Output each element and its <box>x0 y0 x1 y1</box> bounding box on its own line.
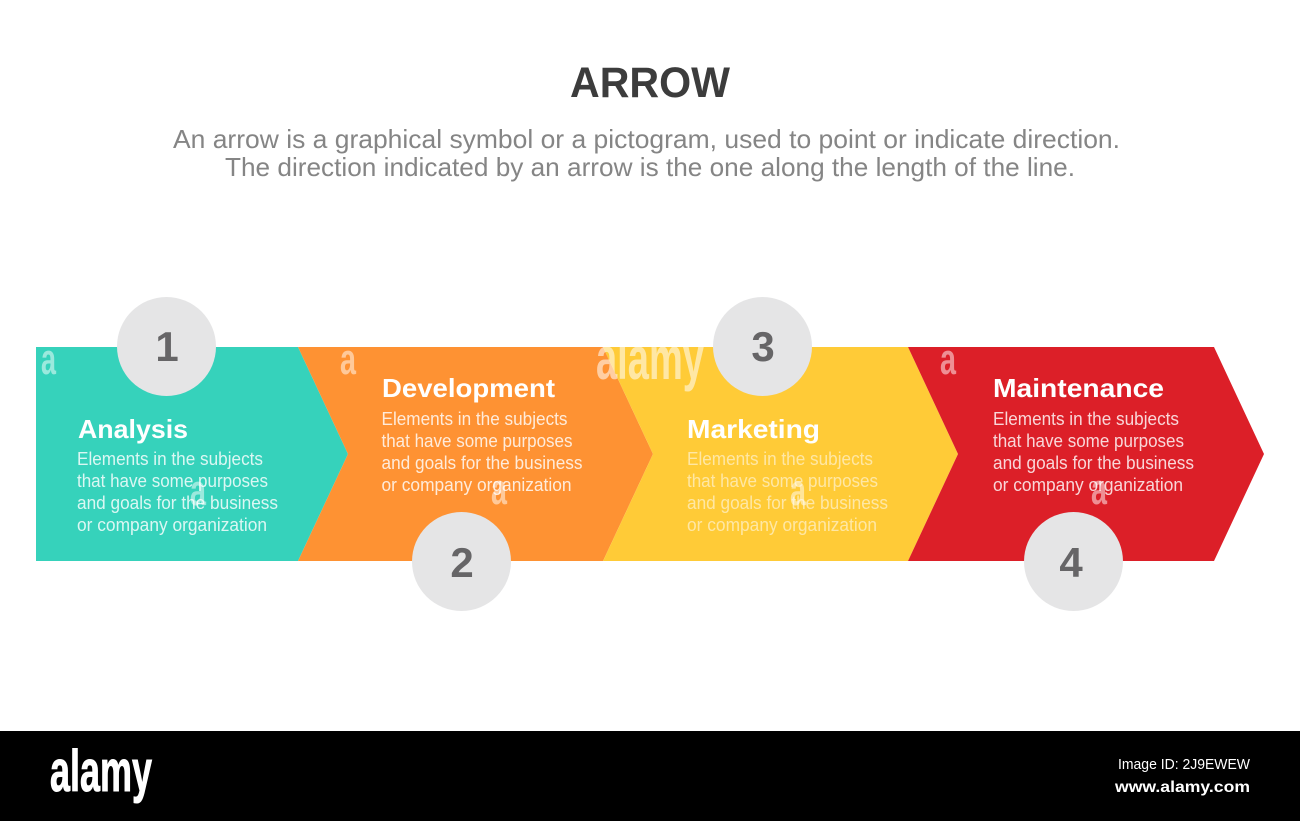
footer bar <box>0 731 1300 821</box>
heading: marketing: Marketing <box>687 414 820 444</box>
watermark marks: alamy <box>596 325 704 392</box>
subtitle text <box>173 124 1120 182</box>
text block: analysis: that have some purposes <box>77 471 268 491</box>
watermark marks: a <box>41 335 56 384</box>
heading: maintenance: Maintenance <box>993 373 1164 403</box>
number badge 1 <box>117 297 216 396</box>
text block: maintenance <box>993 409 1194 495</box>
panel: development arrow segment <box>298 347 653 561</box>
website: www.alamy.com <box>1114 779 1250 796</box>
text block: marketing: and goals for the business <box>687 493 888 513</box>
text block: marketing: or company organization <box>687 515 877 535</box>
title: ARROW <box>570 59 730 107</box>
number badge 4: 4 <box>1059 539 1083 586</box>
text block: maintenance: and goals for the business <box>993 453 1194 473</box>
panel: marketing arrow segment <box>603 347 958 561</box>
text block: development: that have some purposes <box>382 431 572 451</box>
number badge 3 <box>713 297 812 396</box>
watermark marks: a <box>190 466 206 515</box>
watermark marks <box>41 325 1107 515</box>
panel: maintenance arrow segment <box>908 347 1264 561</box>
text block: maintenance: Elements in the subjects <box>993 409 1179 429</box>
panel: analysis arrow segment <box>36 347 348 561</box>
subtitle text: The direction indicated by an arrow is the one along the length of the line. <box>225 152 1075 182</box>
text block: analysis: Elements in the subjects <box>77 449 263 469</box>
text block: analysis: or company organization <box>77 515 267 535</box>
watermark marks: a <box>1091 465 1107 514</box>
number badge 1: 1 <box>155 323 179 370</box>
watermark marks: a <box>491 465 507 514</box>
footer logo: alamy <box>50 739 152 804</box>
text block: development: Elements in the subjects <box>382 409 568 429</box>
number badge 4 <box>1024 512 1123 611</box>
number badge 2 <box>412 512 511 611</box>
heading: analysis: Analysis <box>78 414 188 444</box>
text block: development: and goals for the business <box>382 453 582 473</box>
text block: maintenance: or company organization <box>993 475 1183 495</box>
image id: Image ID: 2J9EWEW <box>1118 756 1251 773</box>
text block: development: or company organization <box>382 475 572 495</box>
number badge 2: 2 <box>450 539 474 586</box>
text block: analysis <box>77 449 278 535</box>
text block: marketing: that have some purposes <box>687 471 878 491</box>
text block: marketing: Elements in the subjects <box>687 449 873 469</box>
text block: analysis: and goals for the business <box>77 493 278 513</box>
text block: marketing <box>687 449 888 535</box>
heading: development: Development <box>382 373 555 403</box>
watermark marks: a <box>790 466 806 515</box>
watermark marks: a <box>340 335 356 384</box>
number badge 3: 3 <box>751 323 775 370</box>
text block: maintenance: that have some purposes <box>993 431 1184 451</box>
subtitle text: An arrow is a graphical symbol or a pictogram, used to point or indicate direction. <box>173 124 1120 154</box>
watermark marks: a <box>940 335 956 384</box>
text block: development <box>382 409 582 495</box>
